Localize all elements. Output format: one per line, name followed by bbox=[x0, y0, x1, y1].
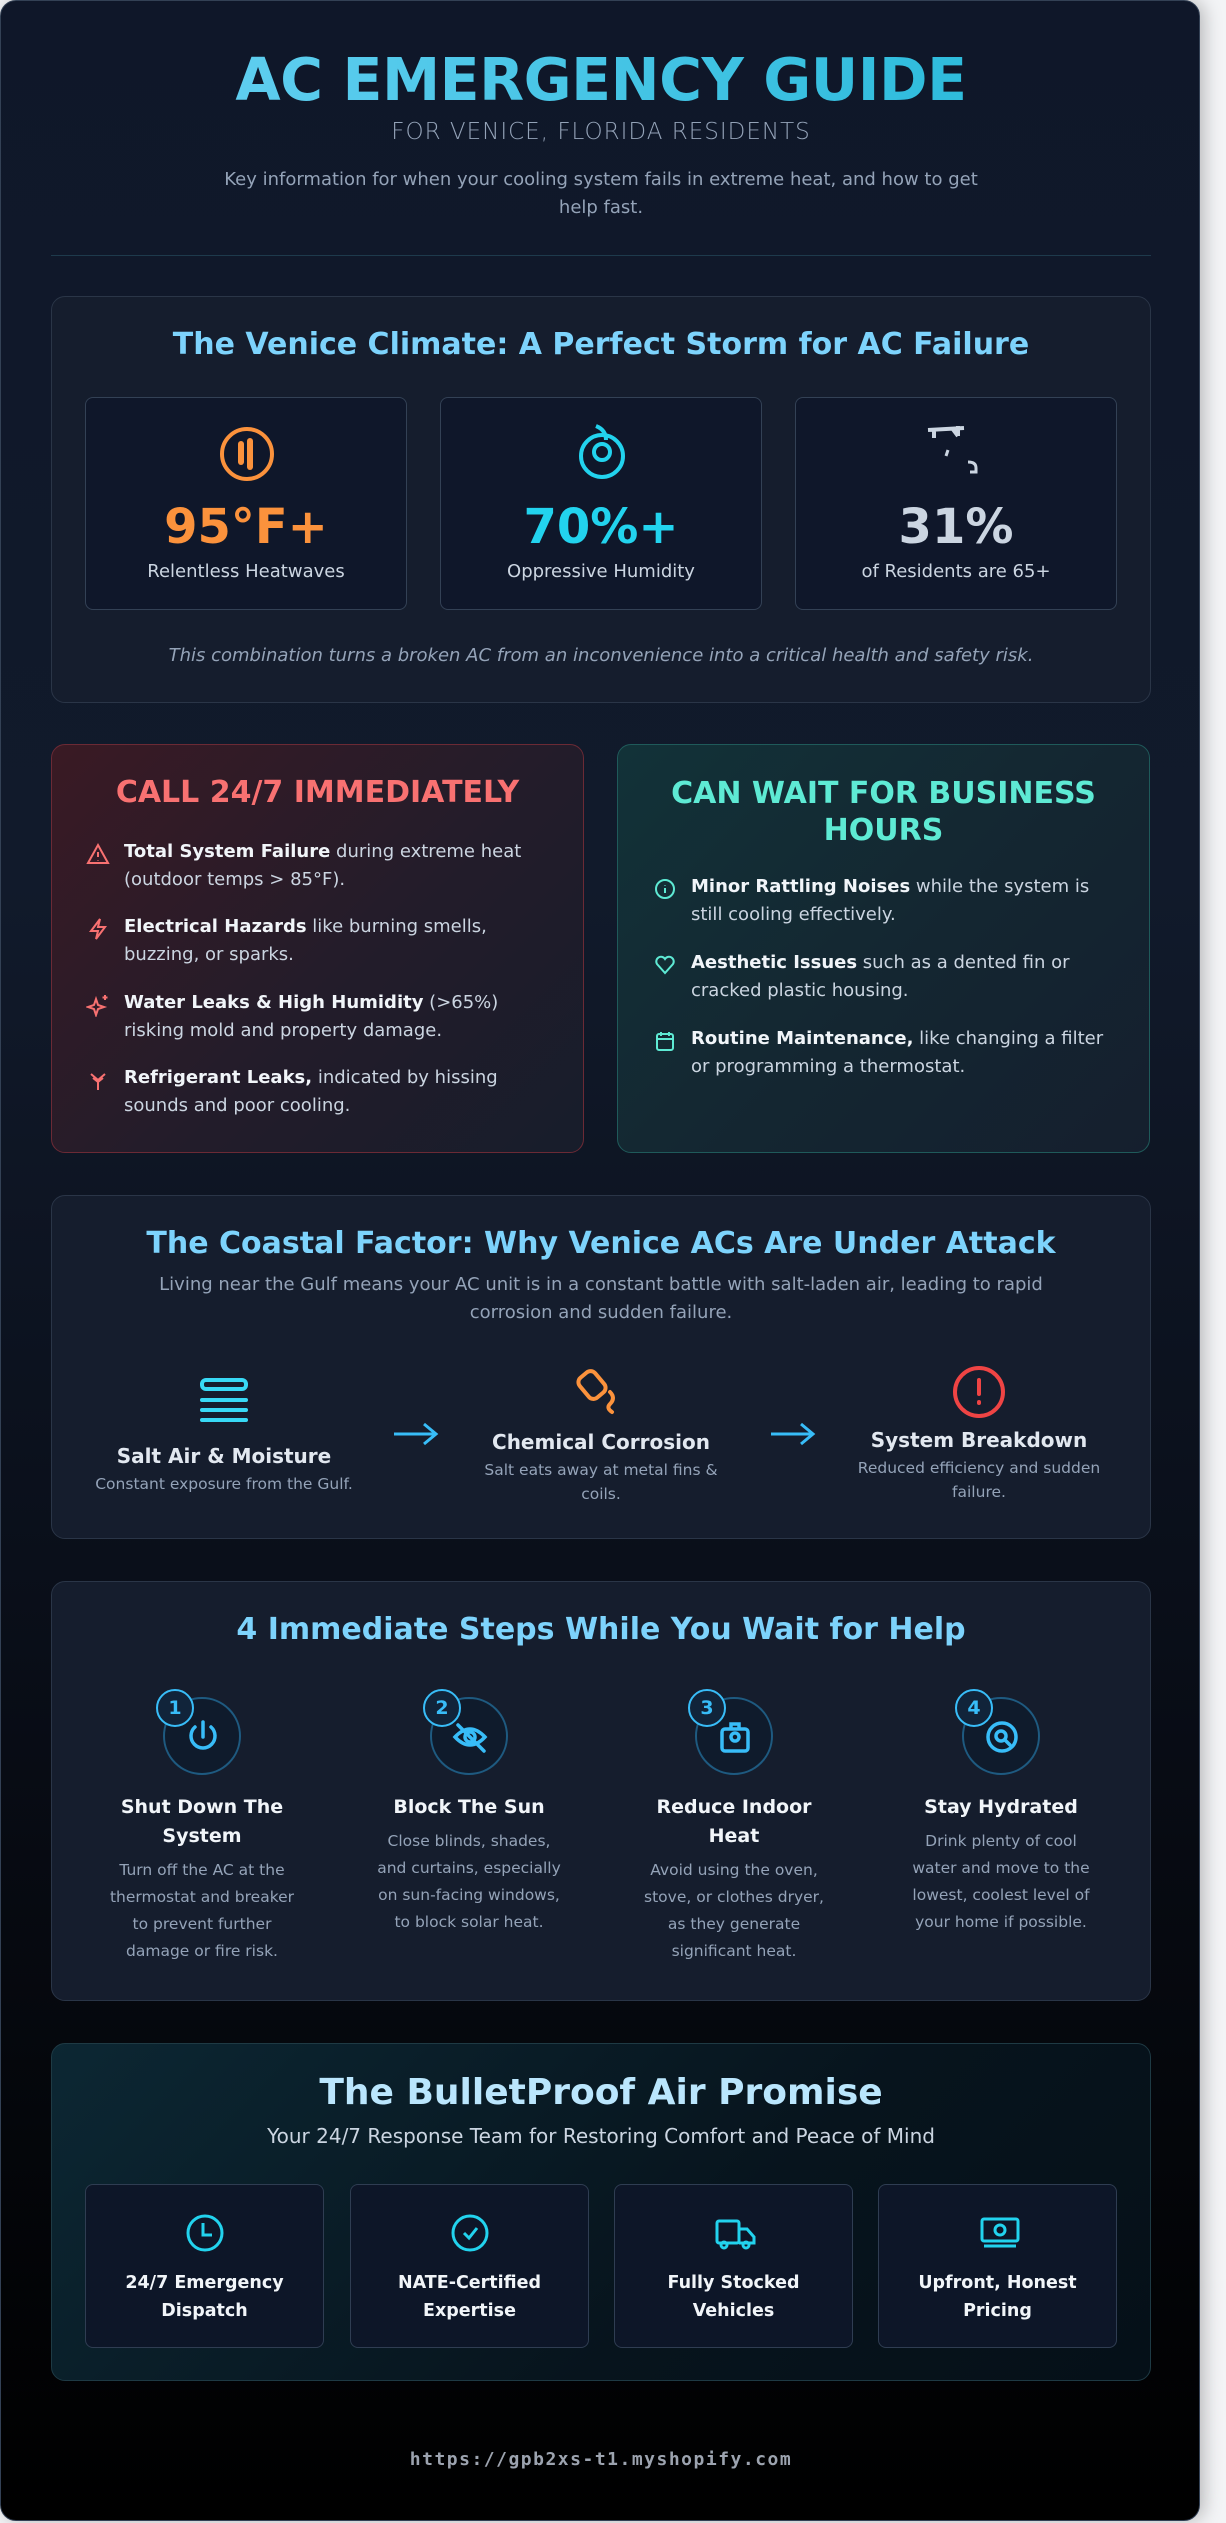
panel: climate bbox=[51, 296, 1151, 703]
heading: climate: The Venice Climate: A Perfect Storm for AC Failure bbox=[173, 327, 1029, 362]
stat: seniors bbox=[795, 397, 1117, 610]
step 2: Close blinds, shades, and curtains, especially on sun-facing windows, to block solar heat. bbox=[377, 1832, 561, 1931]
box: pricing: Pricing bbox=[963, 2301, 1032, 2321]
step 3: Heat bbox=[709, 1825, 759, 1847]
box: vehicles bbox=[614, 2184, 853, 2348]
step 4: Drink plenty of cool water and move to the lowest, coolest level of your home if possible. bbox=[912, 1832, 1090, 1931]
box: vehicles: Fully Stocked bbox=[668, 2273, 799, 2293]
footer url: https://gpb2xs-t1.myshopify.com bbox=[410, 2449, 792, 2470]
stat: heat: 95°F+ bbox=[164, 499, 328, 555]
flow: corrosion: Salt eats away at metal fins & bbox=[484, 1461, 718, 1479]
intro text bbox=[224, 169, 978, 218]
step 1 bbox=[110, 1689, 294, 1960]
box: dispatch bbox=[85, 2184, 324, 2348]
heading: promise: The BulletProof Air Promise bbox=[319, 2072, 883, 2113]
step 3 bbox=[644, 1689, 824, 1960]
panel: immediate steps bbox=[51, 1581, 1151, 2001]
intro text: help fast. bbox=[559, 197, 643, 218]
step 1: 1 bbox=[168, 1697, 182, 1719]
flow: salt air: Salt Air & Moisture bbox=[117, 1444, 331, 1468]
box: NATE: Expertise bbox=[423, 2301, 516, 2321]
box: dispatch: Dispatch bbox=[161, 2301, 248, 2321]
panel: can wait bbox=[617, 744, 1150, 1153]
step 2: Block The Sun bbox=[393, 1796, 545, 1818]
box: pricing: Upfront, Honest bbox=[918, 2273, 1077, 2293]
title: AC EMERGENCY GUIDE bbox=[235, 46, 967, 114]
item: water leaks: Water Leaks & High Humidity (>65%) risking mold and property damage. bbox=[124, 992, 498, 1041]
step 2: 2 bbox=[435, 1697, 449, 1719]
step 1: Shut Down The bbox=[121, 1796, 283, 1818]
heading: wait: CAN WAIT FOR BUSINESS HOURS bbox=[671, 776, 1096, 848]
stat: seniors: 31% bbox=[899, 499, 1013, 555]
item: total failure: Total System Failure during extreme heat (outdoor temps > 85°F). bbox=[124, 841, 521, 890]
flow: breakdown: System Breakdown bbox=[871, 1428, 1087, 1452]
heading: steps: 4 Immediate Steps While You Wait for Help bbox=[236, 1612, 966, 1647]
box: pricing bbox=[878, 2184, 1117, 2348]
stat: heat: Relentless Heatwaves bbox=[147, 561, 345, 582]
box: vehicles: Vehicles bbox=[693, 2301, 774, 2321]
item: aesthetic: Aesthetic Issues such as a dented fin or cracked plastic housing. bbox=[691, 952, 1070, 1001]
flow: corrosion: coils. bbox=[581, 1485, 621, 1503]
stat: heat bbox=[85, 397, 407, 610]
intro text: Key information for when your cooling system fails in extreme heat, and how to get bbox=[224, 169, 978, 190]
box: NATE: NATE-Certified bbox=[398, 2273, 541, 2293]
flow: salt air: Constant exposure from the Gulf. bbox=[95, 1475, 353, 1493]
step 4: Stay Hydrated bbox=[924, 1796, 1078, 1818]
panel: call 24/7 bbox=[51, 744, 584, 1153]
step 4 bbox=[912, 1689, 1090, 1931]
heading: call: CALL 24/7 IMMEDIATELY bbox=[116, 775, 519, 810]
item: maintenance: Routine Maintenance, like changing a filter or programming a thermostat. bbox=[691, 1028, 1103, 1077]
step 3: Reduce Indoor bbox=[656, 1796, 812, 1818]
arrow 1 bbox=[394, 1422, 438, 1446]
step 1: System bbox=[162, 1825, 242, 1847]
panel: promise bbox=[51, 2043, 1151, 2381]
coastal description: Living near the Gulf means your AC unit is in a constant battle with salt-laden air, leading to rapid corrosion and sudden failure. bbox=[159, 1274, 1043, 1323]
box: NATE bbox=[350, 2184, 589, 2348]
promise subtitle: Your 24/7 Response Team for Restoring Comfort and Peace of Mind bbox=[267, 2124, 935, 2148]
flow: corrosion: Chemical Corrosion bbox=[492, 1430, 710, 1454]
flow: salt air bbox=[95, 1378, 353, 1493]
flow: breakdown bbox=[858, 1366, 1100, 1501]
step 3: Avoid using the oven, stove, or clothes dryer, as they generate significant heat. bbox=[644, 1861, 824, 1960]
step 4: 4 bbox=[967, 1697, 981, 1719]
flow: corrosion bbox=[484, 1369, 718, 1503]
item: refrigerant: Refrigerant Leaks, indicated by hissing sounds and poor cooling. bbox=[124, 1067, 498, 1116]
box: dispatch: 24/7 Emergency bbox=[125, 2273, 284, 2293]
subtitle: FOR VENICE, FLORIDA RESIDENTS bbox=[391, 119, 811, 145]
step 1: Turn off the AC at the thermostat and breaker to prevent further damage or fire risk. bbox=[110, 1861, 294, 1960]
arrow 2 bbox=[771, 1422, 816, 1446]
stat: humidity: Oppressive Humidity bbox=[507, 561, 695, 582]
flow: breakdown: failure. bbox=[952, 1483, 1006, 1501]
flow: breakdown: Reduced efficiency and sudden bbox=[858, 1459, 1100, 1477]
note: This combination turns a broken AC from an inconvenience into a critical health and safety risk. bbox=[169, 645, 1033, 666]
title bbox=[1, 42, 1201, 118]
stat: humidity bbox=[440, 397, 762, 610]
step 3: 3 bbox=[700, 1697, 714, 1719]
stat: humidity: 70%+ bbox=[523, 499, 679, 555]
step 2 bbox=[377, 1689, 561, 1931]
item: rattling: Minor Rattling Noises while the system is still cooling effectively. bbox=[691, 876, 1089, 925]
stat: seniors: of Residents are 65+ bbox=[861, 561, 1051, 582]
item: electrical: Electrical Hazards like burning smells, buzzing, or sparks. bbox=[124, 916, 487, 965]
panel: coastal factor bbox=[51, 1195, 1151, 1539]
heading: coastal: The Coastal Factor: Why Venice ACs Are Under Attack bbox=[146, 1226, 1056, 1261]
